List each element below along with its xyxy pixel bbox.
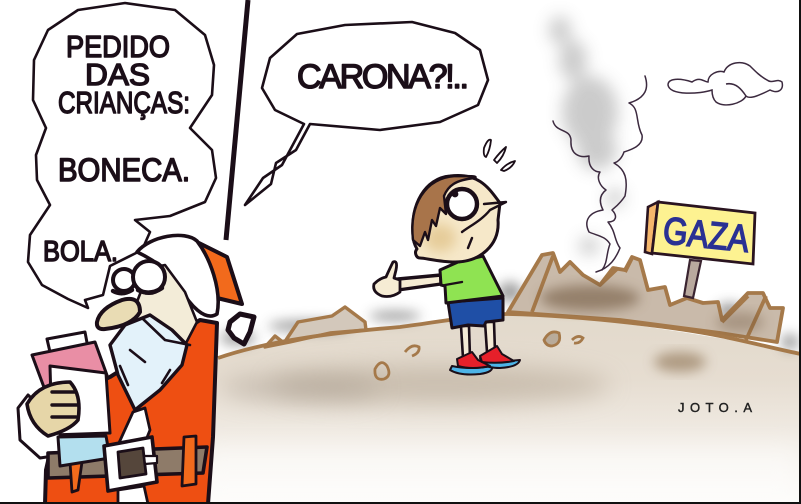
Santa fur front	[118, 408, 150, 504]
ground line	[218, 314, 801, 358]
Santa	[18, 235, 254, 504]
Santa eyes	[113, 269, 135, 291]
Santa hand	[27, 382, 79, 436]
boy hair	[412, 176, 476, 246]
sign: Gaza: GAZA	[661, 210, 752, 261]
balloon: Pedido das crianças: BOLA.	[43, 236, 118, 268]
boy shirt	[440, 256, 503, 303]
boy hand	[374, 262, 400, 296]
grey shadows behind ruins	[220, 282, 799, 350]
sign: Gaza	[645, 202, 755, 298]
sweat drops	[484, 140, 515, 171]
rocks	[375, 332, 583, 379]
cloud	[668, 63, 782, 105]
boy shoes	[450, 346, 520, 374]
Santa face	[130, 265, 197, 345]
pompom	[228, 314, 254, 344]
Santa belt	[48, 447, 207, 478]
balloon: Pedido das crianças: PEDIDO	[66, 29, 170, 64]
Santa hat cone	[195, 241, 242, 304]
Santa nose	[97, 299, 140, 329]
smoke	[549, 16, 624, 255]
boy legs	[461, 322, 495, 358]
boy arm	[398, 275, 441, 290]
cuff	[58, 436, 110, 466]
balloon: Carona: CARONA?!..	[297, 58, 469, 96]
belt loops	[70, 436, 196, 492]
boy head	[413, 175, 500, 262]
boy	[374, 140, 520, 374]
pole	[226, 0, 248, 240]
balloon: Pedido das crianças: DAS	[85, 57, 150, 92]
boy shorts	[448, 298, 503, 328]
smoke outline	[553, 76, 647, 272]
signature: JOTO.A	[678, 400, 752, 415]
boy nose and mouth	[462, 202, 506, 248]
boy eye	[447, 189, 477, 219]
balloon: Pedido das crianças	[28, 3, 216, 308]
Santa hat fur	[137, 235, 218, 316]
balloon: Pedido das crianças: CRIANÇAS:	[58, 85, 190, 120]
Santa sleeve	[18, 395, 60, 458]
buckle	[104, 437, 157, 491]
Santa beard	[110, 315, 187, 410]
ruins left	[265, 307, 366, 347]
ruins right	[508, 253, 783, 342]
balloon: Carona	[245, 22, 488, 205]
balloon: Pedido das crianças: BONECA.	[58, 152, 190, 188]
ground	[200, 314, 801, 504]
papers	[47, 332, 88, 352]
Santa body	[45, 320, 217, 504]
